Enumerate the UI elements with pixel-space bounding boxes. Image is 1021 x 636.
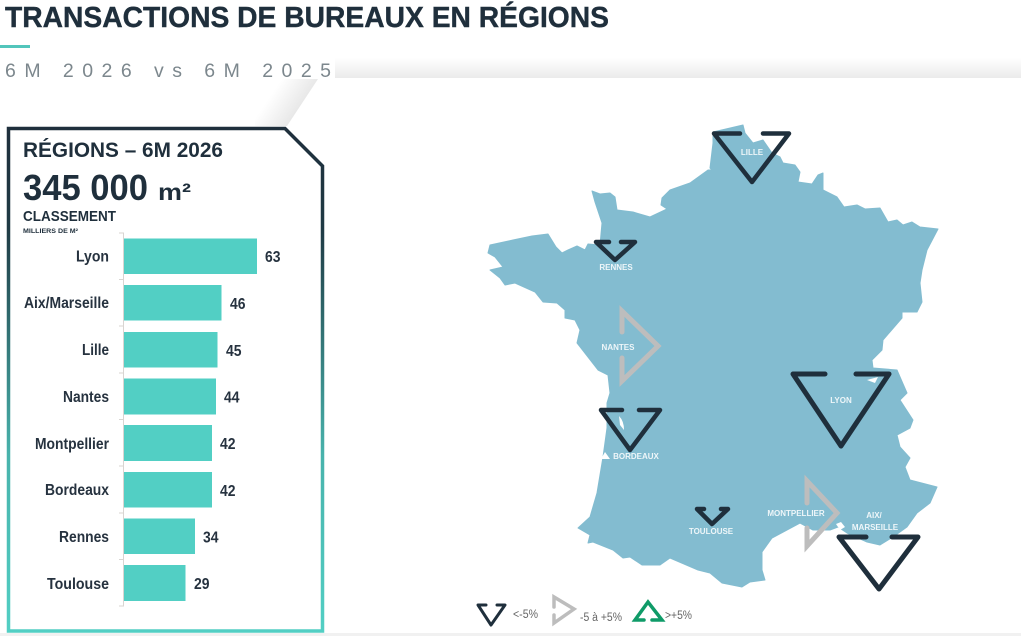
marker: Rennes, below -5%: RENNES <box>599 263 633 272</box>
bar chart: 45 <box>226 343 242 360</box>
bar chart: Aix/Marseille <box>24 295 109 312</box>
marker: Rennes, below -5% <box>596 242 635 272</box>
bar chart: Montpellier <box>35 436 109 453</box>
legend: -5 to +5% <box>554 597 622 624</box>
bar chart: 46 <box>230 296 246 313</box>
bar chart: 63 <box>265 249 281 266</box>
bar chart: 42 <box>220 483 236 500</box>
marker: Lille, below -5%: LILLE <box>741 148 764 157</box>
panel: régions ranking <box>8 128 322 631</box>
marker: Bordeaux, below -5%: BORDEAUX <box>613 452 660 461</box>
marker: Lyon, below -5%: LYON <box>830 396 852 405</box>
subtitle: 6M 2026 vs 6M 2025 <box>5 60 331 82</box>
title: TRANSACTIONS DE BUREAUX EN RÉGIONS <box>5 0 609 34</box>
map of France <box>488 125 938 587</box>
bar chart: Nantes <box>63 389 109 406</box>
marker: Lille, below -5% <box>714 134 789 182</box>
legend: -5 to +5%: -5 à +5% <box>580 612 622 624</box>
bar chart: Rennes <box>59 529 109 546</box>
legend: above +5% <box>635 602 692 622</box>
marker: Nantes, stable <box>602 311 658 381</box>
marker: Montpellier, stable <box>767 481 837 546</box>
title accent rule <box>0 45 30 48</box>
panel heading: RÉGIONS – 6M 2026 <box>23 139 223 162</box>
bar chart: Toulouse <box>47 576 109 593</box>
marker: Toulouse, below -5% <box>689 509 734 536</box>
legend: above +5%: >+5% <box>665 610 692 622</box>
bar chart <box>24 233 281 606</box>
legend: below -5%: <-5% <box>513 609 538 621</box>
legend: below -5% <box>478 605 538 625</box>
bar chart: Bordeaux <box>45 482 109 499</box>
bar chart: Lyon <box>76 248 109 266</box>
marker: Montpellier, stable: MONTPELLIER <box>767 509 825 518</box>
bar chart: 42 <box>220 436 236 453</box>
bar chart: 44 <box>224 390 240 406</box>
total figure: 345 000 <box>23 167 148 208</box>
marker: Bordeaux, below -5% <box>601 410 660 461</box>
marker: Aix/Marseille, below -5%: MARSEILLE <box>852 523 899 532</box>
marker: Lyon, below -5% <box>793 374 889 446</box>
total figure: m² <box>158 179 191 205</box>
ranking heading: CLASSEMENT <box>23 208 116 225</box>
bar chart: Lille <box>82 342 109 359</box>
unit note: MILLIERS DE M² <box>23 228 79 235</box>
marker: Nantes, stable: NANTES <box>602 343 635 352</box>
marker: Toulouse, below -5%: TOULOUSE <box>689 527 734 536</box>
bar chart: 29 <box>194 576 210 593</box>
marker: Aix/Marseille, below -5% <box>839 511 918 589</box>
marker: Aix/Marseille, below -5%: AIX/ <box>866 511 883 520</box>
bar chart: 34 <box>203 530 219 546</box>
legend <box>478 597 692 625</box>
